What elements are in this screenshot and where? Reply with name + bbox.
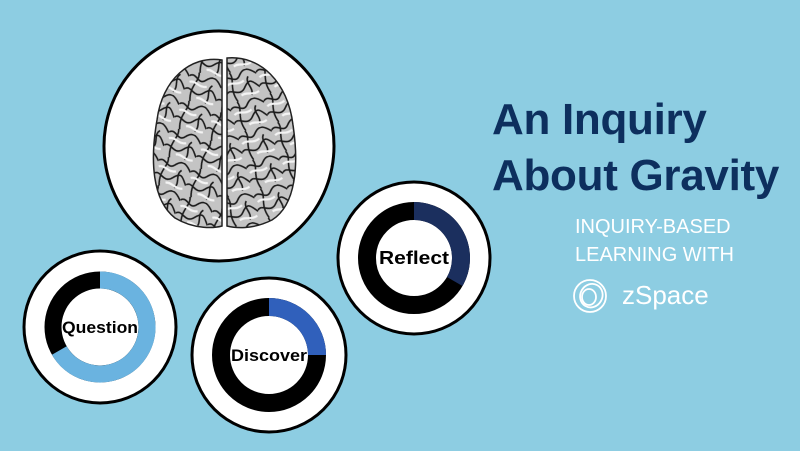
subtitle: INQUIRY-BASED xyxy=(575,216,731,238)
subtitle: LEARNING WITH xyxy=(575,244,734,266)
main illustration xyxy=(22,30,492,434)
title: An Inquiry xyxy=(492,95,707,144)
icon: brain xyxy=(152,57,296,228)
label: reflect: Reflect xyxy=(379,248,449,268)
label: question: Question xyxy=(62,318,138,337)
label: discover: Discover xyxy=(231,346,307,365)
title xyxy=(492,95,780,200)
panel: question xyxy=(24,251,176,403)
subtitle xyxy=(575,216,734,266)
panel: reflect xyxy=(338,182,490,334)
text: zSpace: zSpace xyxy=(622,280,709,310)
logo: zSpace xyxy=(573,279,709,313)
panel: discover xyxy=(192,278,346,432)
title: About Gravity xyxy=(492,151,779,200)
icon: zSpace rings xyxy=(573,279,607,313)
panel: brain circle xyxy=(102,30,336,262)
